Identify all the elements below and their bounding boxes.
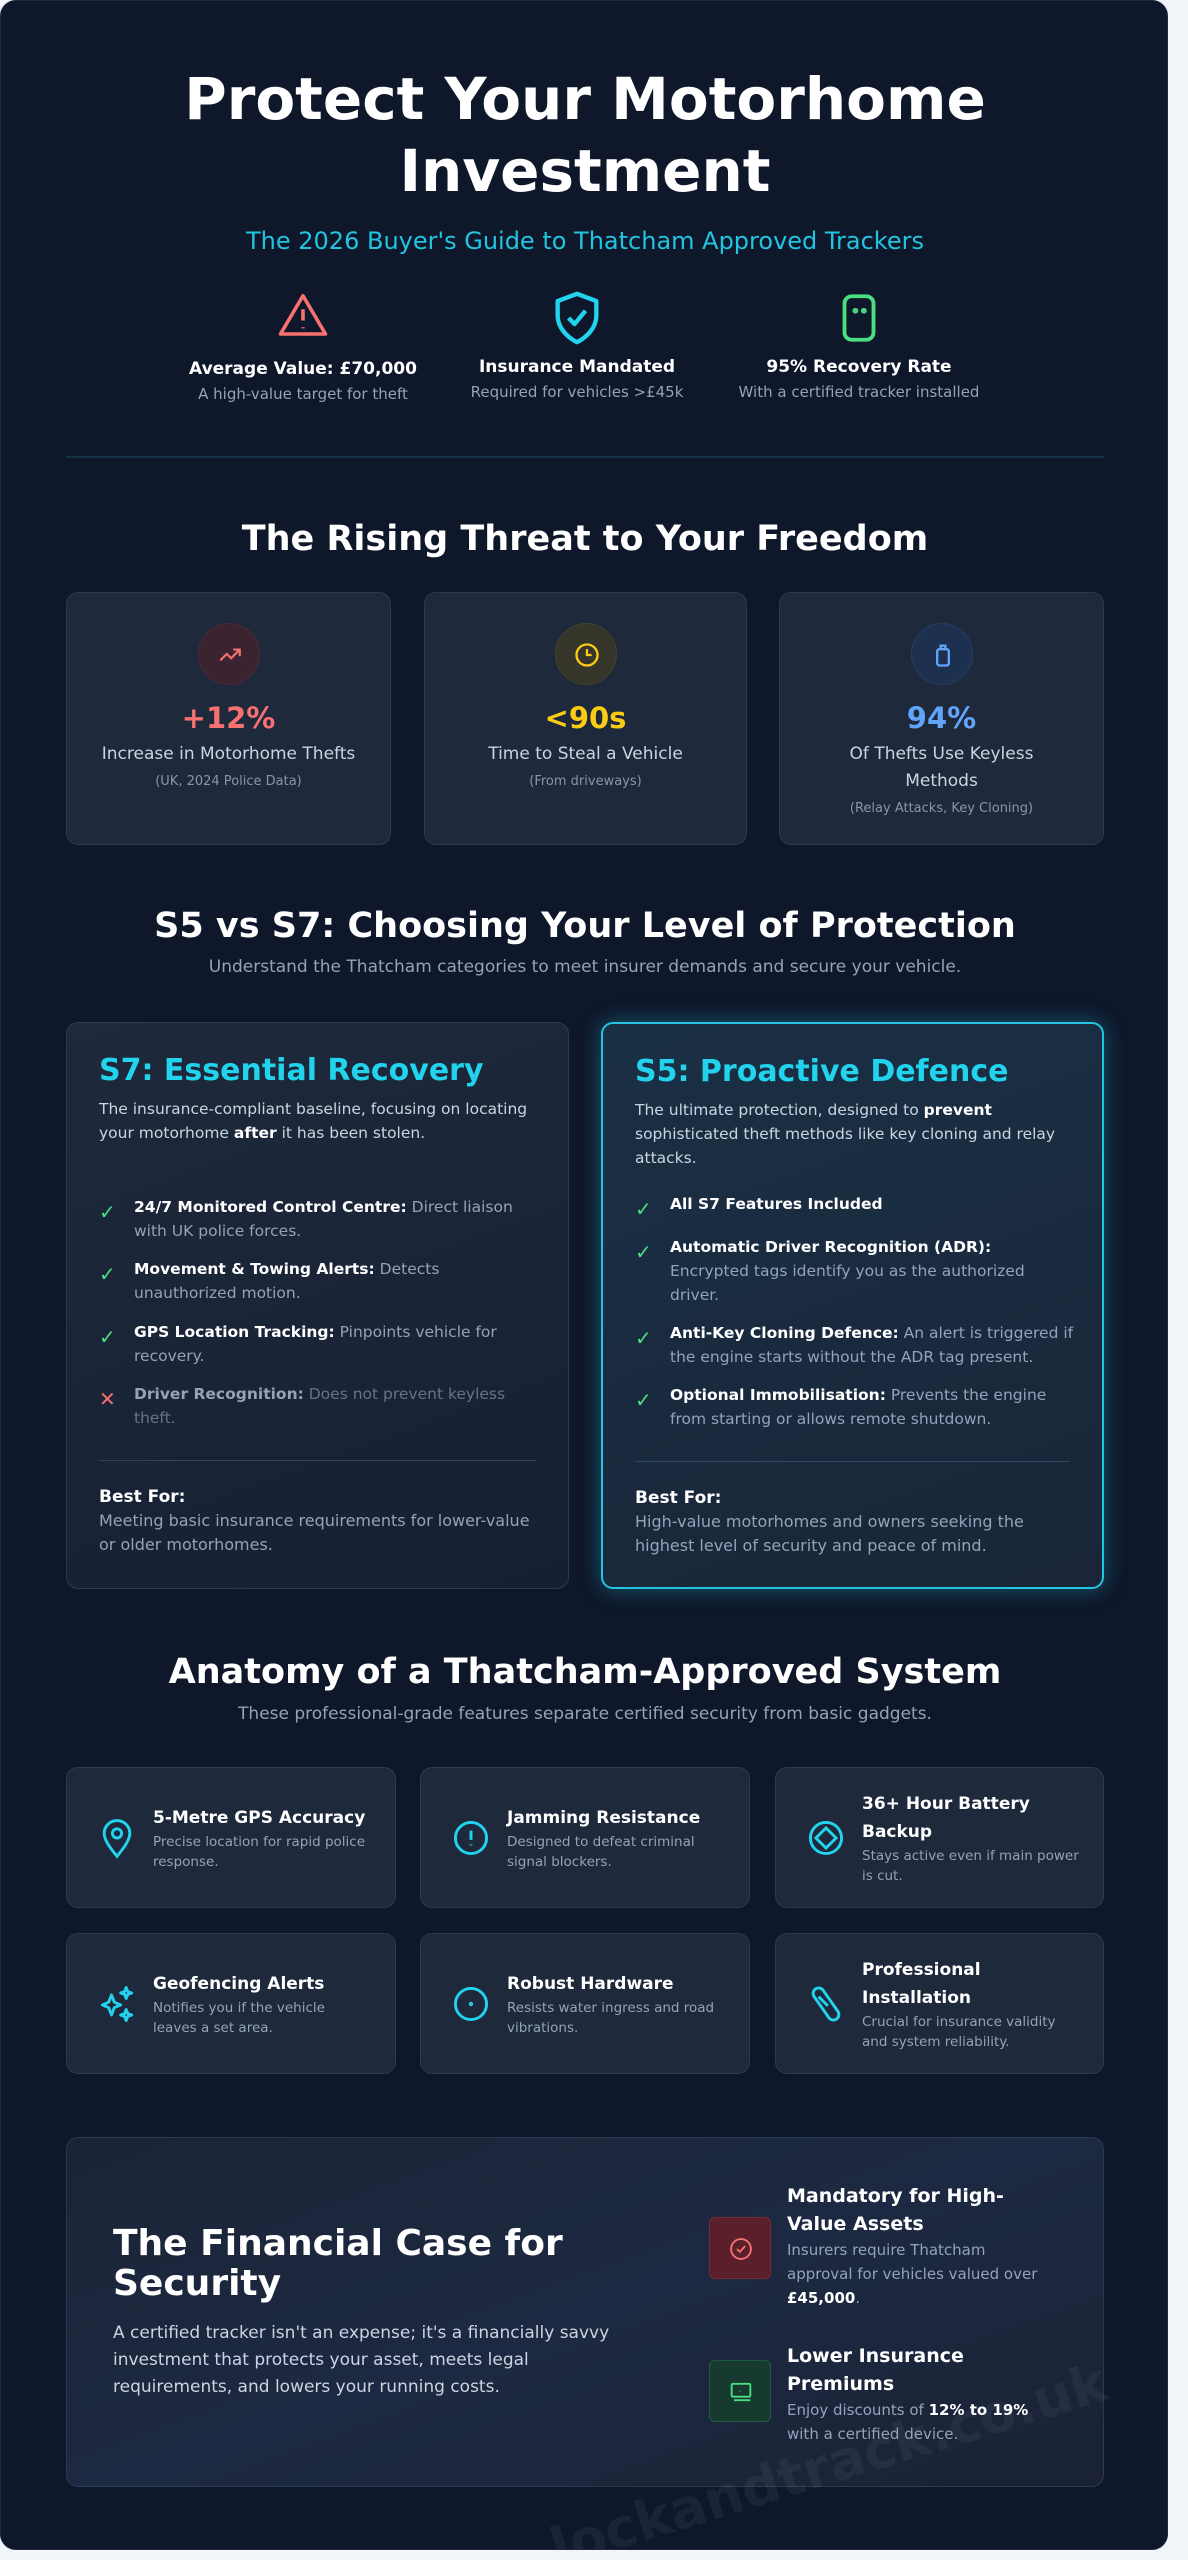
panel: financial case xyxy=(66,2137,1104,2487)
benefit: premiums: Enjoy discounts of 12% to 19% with a certified device. xyxy=(787,2401,1028,2443)
hero stat: average value: Average Value: £70,000 xyxy=(189,359,417,379)
S7 features xyxy=(99,1198,513,1427)
feature: battery: 36+ Hour Battery Backup xyxy=(862,1794,1030,1842)
stat card: time: Time to Steal a Vehicle xyxy=(488,744,683,764)
heading: rising threat: The Rising Threat to Your Freedom xyxy=(242,519,928,559)
title xyxy=(184,65,986,205)
stat card: keyless: 94% xyxy=(907,701,976,735)
feature: GPS: Precise location for rapid police response. xyxy=(153,1834,365,1870)
S5 features: ✓ xyxy=(635,1197,652,1221)
icon: money xyxy=(709,2360,771,2422)
stat card: time: <90s xyxy=(545,701,626,735)
title: Investment xyxy=(399,137,771,205)
icon: check badge xyxy=(709,2217,771,2279)
S5 features: Optional Immobilisation: Prevents the engine from starting or allows remote shutdown. xyxy=(670,1386,1046,1428)
stat card: keyless: Methods xyxy=(905,771,978,791)
financial paragraph: A certified tracker isn't an expense; it's a financially savvy investment that protects your asset, meets legal requirements, and lowers your running costs. xyxy=(113,2323,609,2397)
S5 best for: High-value motorhomes and owners seeking the highest level of security and peace of mind. xyxy=(635,1512,1024,1555)
feature: installation xyxy=(775,1933,1104,2074)
S5 features: Automatic Driver Recognition (ADR): Encrypted tags identify you as the authorized driver. xyxy=(670,1238,1025,1304)
S7 title: S7: Essential Recovery xyxy=(99,1053,484,1088)
feature: geofencing xyxy=(66,1933,396,2074)
S7 best for xyxy=(99,1487,530,1554)
stat card: thefts: (UK, 2024 Police Data) xyxy=(155,774,302,789)
panel: S5 xyxy=(601,1022,1104,1589)
benefit: premiums: Lower Insurance xyxy=(787,2345,964,2367)
financial title: Security xyxy=(113,2263,281,2304)
hero stat: recovery: 95% Recovery Rate xyxy=(766,357,952,377)
icon: trend xyxy=(198,623,260,685)
financial title: The Financial Case for xyxy=(113,2223,563,2264)
feature: jamming xyxy=(420,1767,750,1908)
feature: hardware: Resists water ingress and road vibrations. xyxy=(507,2000,714,2036)
feature: hardware: Robust Hardware xyxy=(507,1974,674,1994)
subtitle: The 2026 Buyer's Guide to Thatcham Approved Trackers xyxy=(246,227,924,255)
S5 features: All S7 Features Included xyxy=(670,1195,883,1213)
feature: geofencing: Notifies you if the vehicle leaves a set area. xyxy=(153,2000,325,2036)
hero stat: recovery xyxy=(739,294,979,401)
S7 features: Driver Recognition: Does not prevent keyless theft. xyxy=(134,1385,505,1427)
feature: geofencing: Geofencing Alerts xyxy=(153,1974,324,1994)
stat card: thefts xyxy=(66,592,391,845)
panel: S7 xyxy=(66,1022,569,1589)
S7 best for: Best For: xyxy=(99,1487,185,1507)
feature: battery xyxy=(775,1767,1104,1908)
feature: hardware xyxy=(420,1933,750,2074)
benefit: premiums: Premiums xyxy=(787,2373,894,2395)
hero stat: insurance: Insurance Mandated xyxy=(479,357,675,377)
feature: jamming: Designed to defeat criminal signal blockers. xyxy=(507,1834,695,1870)
hero stat: insurance: Required for vehicles >£45k xyxy=(471,383,683,401)
benefit: mandatory: Insurers require Thatcham approval for vehicles valued over £45,000. xyxy=(787,2241,1037,2307)
stat card: thefts: +12% xyxy=(182,701,275,735)
hero stat: insurance xyxy=(471,292,684,401)
benefit: mandatory: Mandatory for High-Value Assets xyxy=(787,2185,1004,2235)
feature: jamming: Jamming Resistance xyxy=(507,1808,700,1828)
S5 features xyxy=(635,1195,1074,1428)
financial title xyxy=(113,2223,563,2304)
feature: GPS: 5-Metre GPS Accuracy xyxy=(153,1808,365,1828)
stat card: thefts: Increase in Motorhome Thefts xyxy=(102,744,355,764)
heading: anatomy: Anatomy of a Thatcham-Approved System xyxy=(169,1652,1001,1692)
S5 features: ✓ xyxy=(635,1388,652,1412)
S5 title: S5: Proactive Defence xyxy=(635,1054,1008,1089)
icon: shield xyxy=(556,292,598,344)
hero stat: average value: A high-value target for theft xyxy=(198,385,408,403)
stat card: keyless xyxy=(779,592,1104,845)
feature: battery: Stays active even if main power is cut. xyxy=(862,1848,1079,1884)
hero stat: average value xyxy=(189,294,417,403)
feature: GPS xyxy=(66,1767,396,1908)
icon: key fob xyxy=(910,623,972,685)
hero stat: recovery: With a certified tracker installed xyxy=(739,383,979,401)
stat card: time xyxy=(424,592,747,845)
benefit: mandatory xyxy=(709,2185,1038,2307)
S7 description: The insurance-compliant baseline, focusing on locating your motorhome after it has been stolen. xyxy=(99,1100,527,1142)
stat card: keyless: (Relay Attacks, Key Cloning) xyxy=(850,801,1033,816)
S5 features: ✓ xyxy=(635,1326,652,1350)
S7 features: ✓ xyxy=(99,1262,116,1286)
S7 features: Movement & Towing Alerts: Detects unauthorized motion. xyxy=(134,1260,439,1302)
S7 features: ✓ xyxy=(99,1325,116,1349)
feature: installation: Professional Installation xyxy=(862,1960,981,2008)
S7 features: 24/7 Monitored Control Centre: Direct liaison with UK police forces. xyxy=(134,1198,513,1240)
S7 features: ✕ xyxy=(99,1387,116,1411)
benefit: premiums xyxy=(709,2345,1028,2443)
S7 features: GPS Location Tracking: Pinpoints vehicle for recovery. xyxy=(134,1323,497,1365)
hero stats row xyxy=(189,292,979,403)
title: Protect Your Motorhome xyxy=(184,65,986,133)
icon: device xyxy=(842,294,876,342)
S5 description: The ultimate protection, designed to prevent sophisticated theft methods like key cloning and relay attacks. xyxy=(635,1101,1055,1167)
subheading: These professional-grade features separate certified security from basic gadgets. xyxy=(238,1704,932,1724)
icon: warning xyxy=(278,294,328,336)
S5 features: ✓ xyxy=(635,1240,652,1264)
S5 best for: Best For: xyxy=(635,1488,721,1508)
S7 best for: Meeting basic insurance requirements for lower-value or older motorhomes. xyxy=(99,1511,530,1554)
feature: installation: Crucial for insurance validity and system reliability. xyxy=(862,2014,1056,2050)
icon: clock xyxy=(554,623,616,685)
heading: S5 vs S7: S5 vs S7: Choosing Your Level of Protection xyxy=(154,906,1016,946)
S7 features: ✓ xyxy=(99,1200,116,1224)
stat card: keyless: Of Thefts Use Keyless xyxy=(850,744,1033,764)
subheading: Understand the Thatcham categories to meet insurer demands and secure your vehicle. xyxy=(209,957,961,977)
stat card: time: (From driveways) xyxy=(529,774,642,789)
S5 best for xyxy=(635,1488,1024,1555)
S5 features: Anti-Key Cloning Defence: An alert is triggered if the engine starts without the ADR tag present. xyxy=(670,1324,1073,1366)
